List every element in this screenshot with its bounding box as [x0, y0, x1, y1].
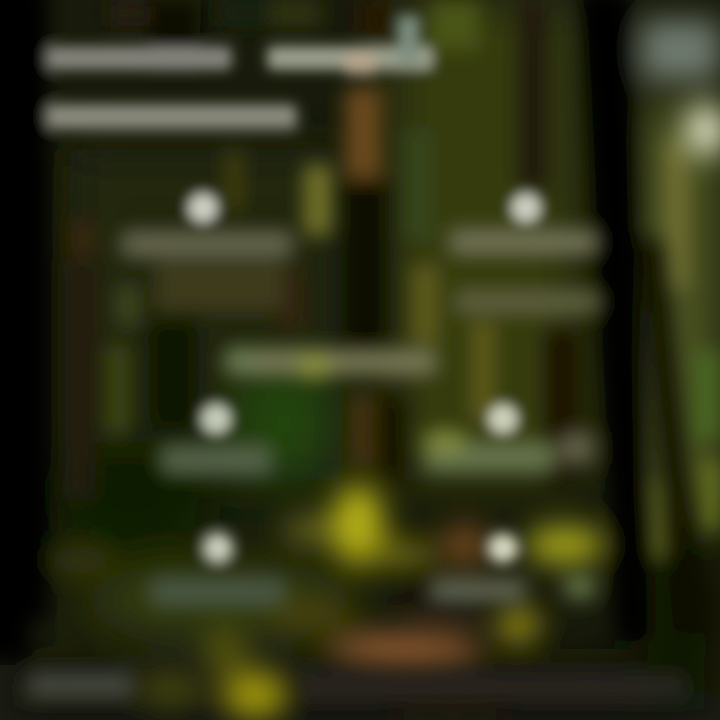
- background: forest path: [325, 525, 510, 720]
- background: dark right trunk: [580, 0, 705, 640]
- title line 2: [46, 104, 297, 129]
- block: lower right bullet: [430, 533, 595, 602]
- lower right text: [430, 575, 595, 602]
- background: vertical tree stripes: [62, 0, 720, 560]
- center heading: [224, 348, 436, 378]
- middle right text: [423, 430, 594, 472]
- top left text: [122, 232, 292, 312]
- icon: top left circle: [188, 193, 218, 223]
- title line 1: [46, 16, 433, 74]
- middle left text: [160, 445, 272, 475]
- background: central brown trunk: [345, 0, 406, 480]
- icon: top right circle: [511, 193, 541, 223]
- background: dark left trunk: [0, 0, 48, 660]
- background: bright sky through the canopy: [640, 20, 720, 156]
- block: middle right bullet: [423, 404, 594, 472]
- background: moss and yellow undergrowth: [44, 483, 605, 719]
- block: middle left bullet: [160, 404, 272, 475]
- block: lower left bullet: [150, 533, 285, 606]
- lower left text: [150, 578, 285, 606]
- icon: lower right circle: [488, 533, 518, 563]
- icon: middle right circle: [488, 404, 518, 434]
- top right text: [450, 230, 600, 314]
- title: [46, 16, 433, 129]
- block: top right bullet: [450, 193, 600, 314]
- block: top left bullet: [122, 193, 292, 312]
- icon: lower left circle: [203, 533, 233, 563]
- footer text: [28, 672, 685, 698]
- icon: middle left circle: [201, 404, 231, 434]
